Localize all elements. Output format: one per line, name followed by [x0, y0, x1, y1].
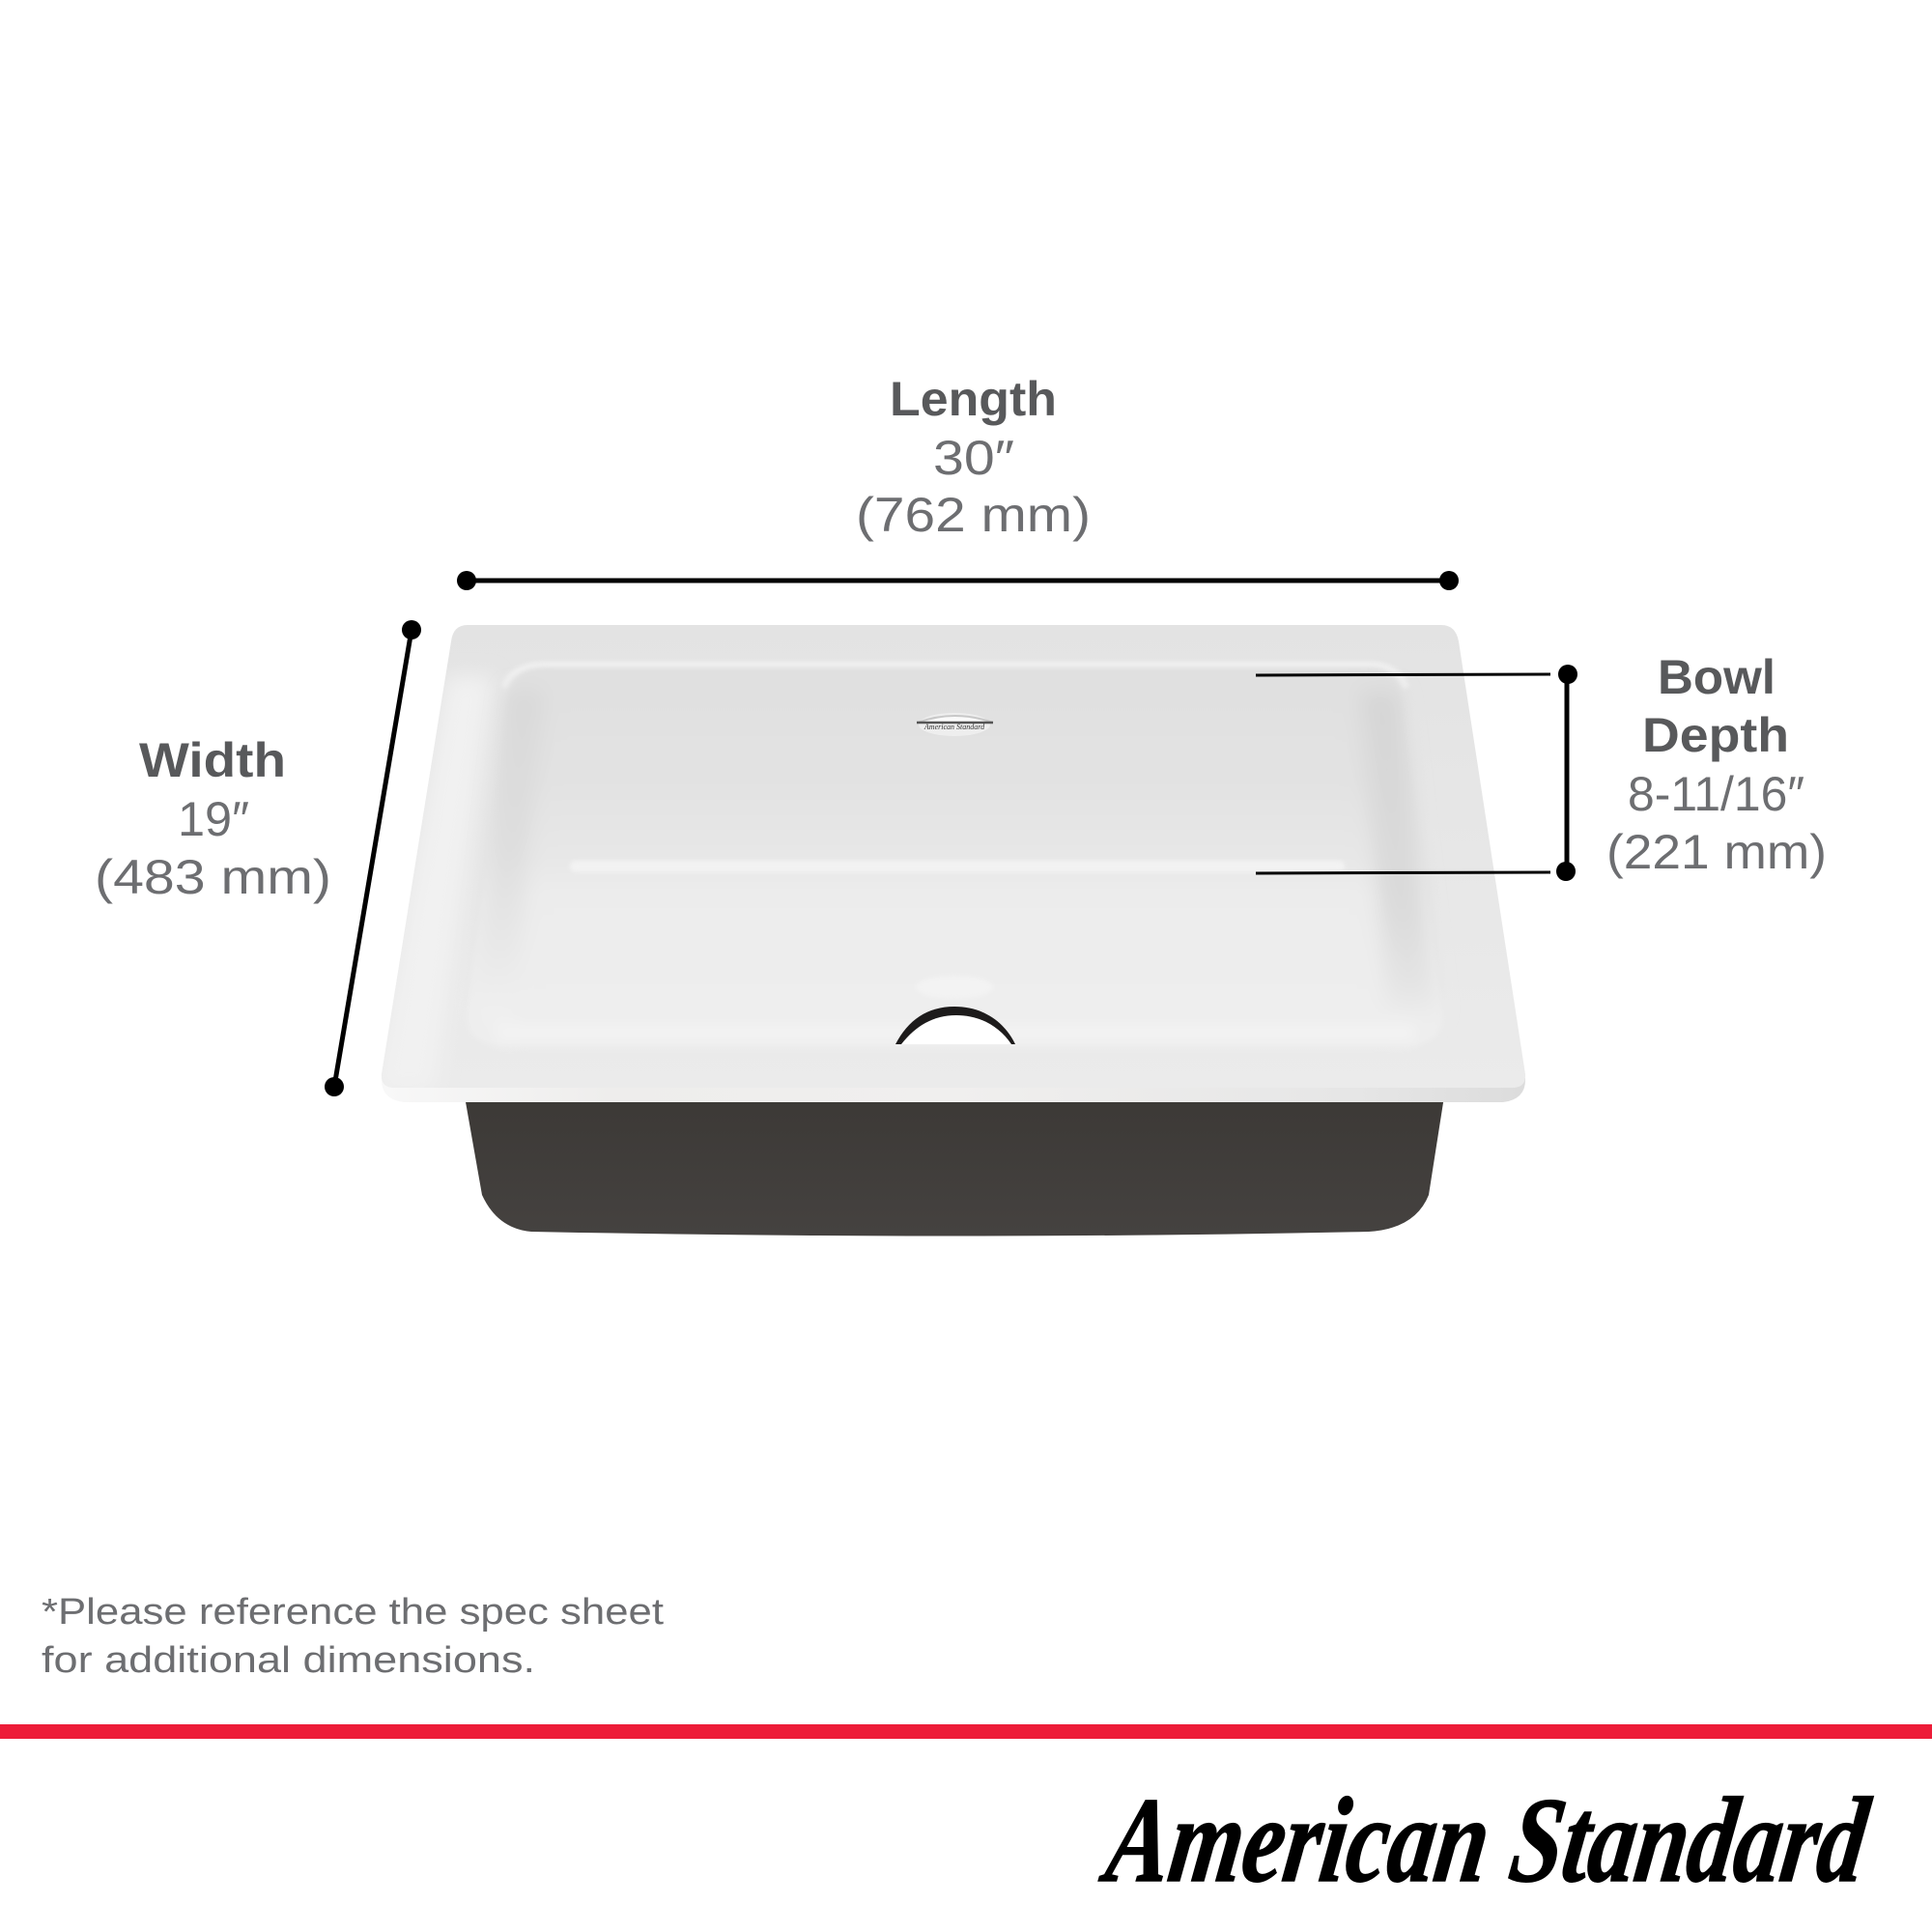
width label: (483 mm) [95, 850, 331, 904]
bowl depth measure bracket [1256, 665, 1577, 881]
width label: Width [139, 733, 286, 787]
length label: 30″ [933, 431, 1014, 485]
length measure line [457, 571, 1459, 590]
sink underside basin [465, 1096, 1444, 1236]
dimension: length [457, 372, 1459, 590]
width label [95, 733, 331, 904]
red divider band [0, 1724, 1932, 1739]
sink top rim [382, 625, 1525, 1088]
length label: (762 mm) [856, 488, 1091, 542]
footnote: for additional dimensions. [42, 1640, 535, 1681]
footnote [42, 1592, 665, 1681]
bowl depth label: Bowl [1658, 650, 1776, 704]
bowl depth label: 8-11/16″ [1628, 767, 1804, 821]
length label [856, 372, 1091, 542]
bowl depth label: Depth [1642, 708, 1789, 762]
dimension: width [95, 620, 421, 1096]
overflow badge [917, 713, 993, 736]
sink illustration [377, 625, 1525, 1236]
bowl lip highlight [504, 665, 1406, 688]
dimension: bowl depth [1256, 650, 1827, 881]
sink front edge [382, 1078, 1525, 1102]
width label: 19″ [178, 792, 249, 846]
rim edge lighting [411, 679, 487, 972]
sink bowl [468, 665, 1442, 1046]
infographic canvas [0, 381, 1932, 1883]
width measure line [325, 620, 421, 1096]
footnote: *Please reference the spec sheet [42, 1592, 665, 1633]
drain opening [895, 976, 1015, 1044]
overflow badge: American Standard [923, 723, 985, 731]
length label: Length [890, 372, 1057, 426]
back wall shelf highlight [570, 861, 1345, 872]
bowl depth label [1606, 650, 1827, 879]
bowl depth label: (221 mm) [1606, 825, 1827, 879]
bowl interior and shading [468, 668, 1442, 1046]
